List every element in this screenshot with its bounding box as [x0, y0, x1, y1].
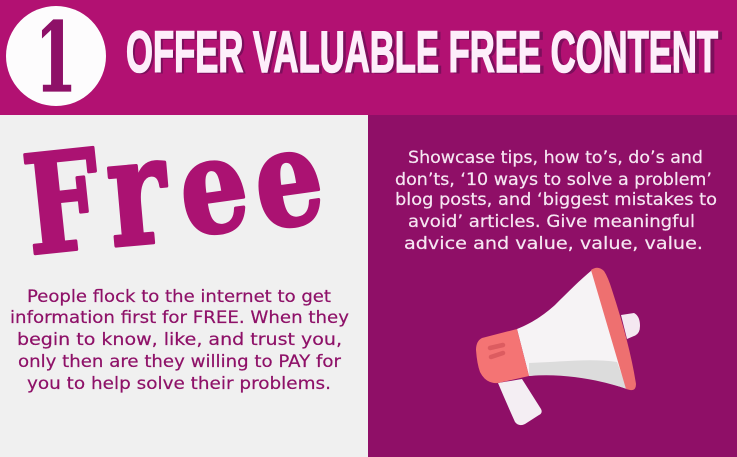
text block: right paragraph: advice and value, value, value.: [404, 234, 703, 253]
text block: right paragraph: blog posts, and ‘biggest mistakes to: [395, 190, 717, 209]
megaphone red collar: [476, 329, 529, 383]
panel: left light background: [0, 115, 368, 457]
heading: Free: e: [244, 97, 332, 261]
header band: [0, 0, 737, 115]
text block: left paragraph: [10, 287, 349, 393]
text block: right paragraph: don’ts, ‘10 ways to solve a problem’: [395, 170, 712, 189]
panel: right purple background: [368, 115, 737, 457]
megaphone cone shadow: [529, 360, 627, 389]
heading: Free: e: [169, 106, 257, 268]
heading: Free: r: [100, 102, 175, 282]
text block: right paragraph: avoid’ articles. Give meaningful: [408, 212, 695, 231]
text block: left paragraph: People flock to the internet to get: [27, 287, 332, 306]
number badge: [6, 1, 106, 114]
megaphone white cone: [517, 270, 627, 389]
megaphone back knob: [621, 313, 640, 339]
heading: Free: F: [17, 119, 108, 286]
heading: Free: [17, 97, 332, 286]
megaphone rim: [591, 268, 636, 390]
icon: megaphone: [476, 268, 640, 425]
text block: left paragraph: begin to know, like, and trust you,: [17, 330, 342, 349]
text block: left paragraph: only then are they willing to PAY for: [18, 352, 341, 371]
text block: right paragraph: Showcase tips, how to’s, do’s and: [408, 148, 703, 167]
megaphone slots: [490, 345, 503, 357]
megaphone handle: [498, 379, 542, 425]
text block: left paragraph: you to help solve their problems.: [27, 374, 331, 393]
number badge: 1: [35, 1, 77, 114]
text block: left paragraph: information first for FREE. When they: [10, 308, 349, 327]
text block: right paragraph: [395, 148, 717, 253]
